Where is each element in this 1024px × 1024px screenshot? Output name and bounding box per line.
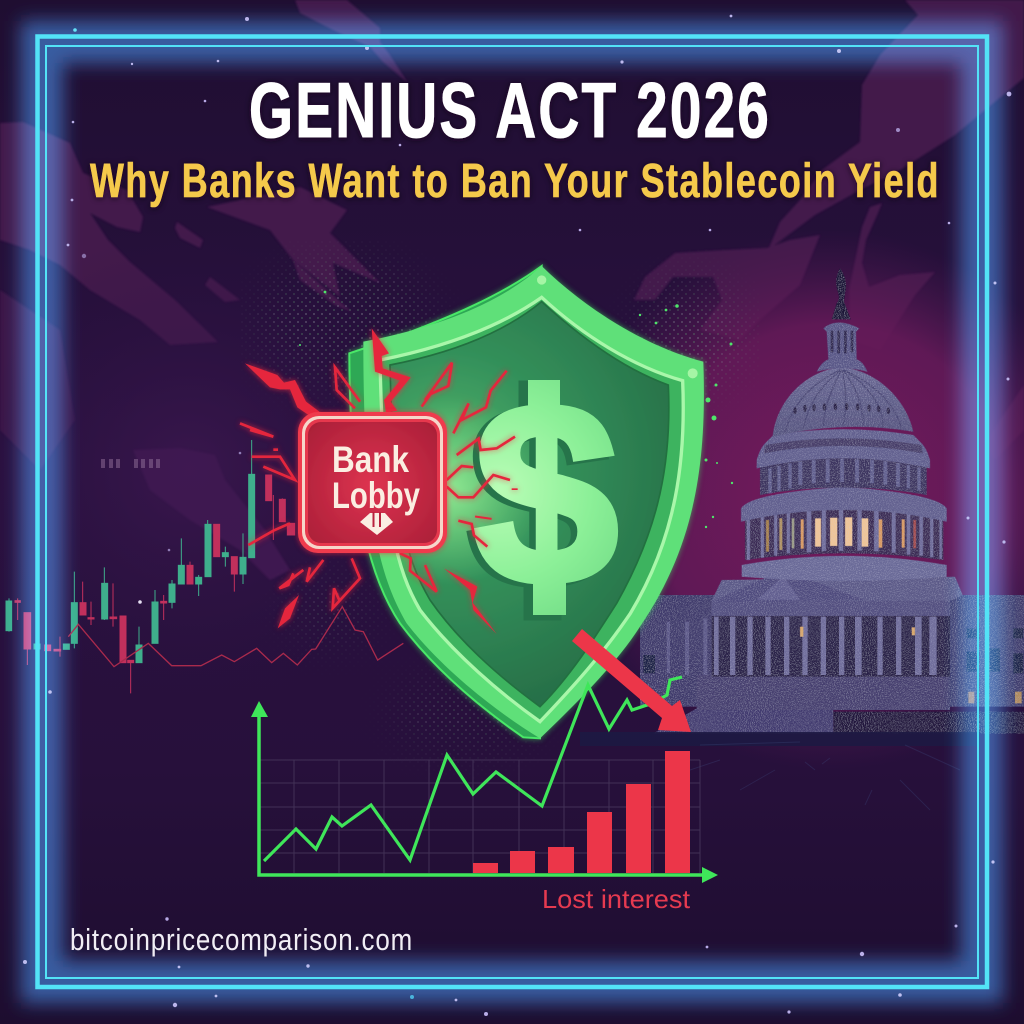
title: GENIUS ACT 2026	[249, 66, 771, 154]
capitol: right wing windows	[643, 628, 1023, 703]
capitol: upper windows	[768, 459, 921, 493]
bolt: upper arrow left	[335, 367, 360, 408]
background: halftone dots	[240, 240, 760, 780]
bolt: right lower	[447, 475, 510, 497]
bank lobby sign	[298, 412, 447, 553]
capitol: dome	[773, 367, 913, 437]
dollar sign	[468, 349, 618, 641]
lost interest label: Lost interest	[542, 884, 691, 914]
shield	[349, 266, 704, 738]
bolt: far left	[240, 423, 273, 437]
sign: lobby text: Lobby	[332, 475, 420, 516]
capitol: drum base	[742, 556, 947, 581]
growth and lost interest chart	[251, 677, 718, 883]
capitol: dome ribs	[785, 370, 902, 432]
background: faint tick blocks above candles	[101, 459, 160, 468]
capitol: columns	[667, 617, 937, 675]
bolt: right bottom	[458, 521, 487, 547]
sign: face	[308, 422, 437, 543]
shield: 3d side rim	[349, 266, 542, 738]
bolt: upper arrow right	[422, 363, 452, 407]
capitol: portico shadow	[712, 615, 950, 677]
chart: red interest bars	[473, 751, 690, 873]
bolt: bottom centre	[400, 553, 437, 592]
bolt: lower diamond	[278, 595, 299, 628]
capitol: cornice	[757, 429, 930, 468]
capitol: wings	[640, 595, 1024, 707]
dollar: face: $	[474, 349, 618, 638]
bolt: top	[372, 328, 411, 413]
green specks	[299, 291, 733, 578]
bolt: bottom left arrow	[333, 558, 360, 608]
bolt: right top	[453, 371, 507, 433]
capitol: dome oculi	[793, 403, 890, 414]
green burst behind dollar	[355, 395, 545, 585]
capitol: colonnade columns	[747, 509, 942, 560]
sign: border	[298, 412, 447, 553]
capitol: portico lights	[800, 627, 915, 637]
chart: axes	[251, 701, 718, 883]
capitol: lower storey	[697, 675, 950, 710]
capitol: lower colonnade	[745, 507, 943, 560]
lightning bolts	[240, 328, 518, 634]
capitol: statue	[832, 268, 851, 319]
capitol: lit windows	[766, 517, 916, 552]
chart: green yield line	[264, 677, 682, 861]
background: magenta smoke clouds	[0, 0, 1024, 580]
capitol: steps	[653, 708, 833, 733]
capitol: upper drum	[760, 455, 927, 495]
dollar: shadow: $	[468, 352, 612, 641]
capitol: lantern	[817, 322, 867, 372]
bolt: fragments	[273, 448, 518, 520]
footer url: bitcoinpricecomparison.com	[70, 922, 413, 957]
capitol: entablature	[712, 600, 950, 616]
capitol: terrace	[712, 577, 963, 601]
candlestick chart	[6, 440, 295, 693]
shield: inner step	[380, 297, 683, 722]
capitol building	[640, 268, 1024, 733]
capitol: dark plinth	[833, 712, 1024, 733]
sign: down icon	[360, 512, 393, 535]
shield: main plate	[363, 266, 704, 738]
chart: grid	[260, 760, 700, 873]
bolt: right middle	[457, 437, 515, 455]
red down arrow	[572, 629, 691, 732]
shield: rivets	[537, 275, 698, 378]
bolt: upper left	[245, 363, 319, 419]
ground streaks	[580, 732, 980, 810]
sign: bank text: Bank	[332, 439, 409, 480]
capitol: pediment	[712, 570, 863, 602]
shield: dark panel	[390, 302, 669, 707]
background: glow behind Capitol and left chart	[0, 230, 1024, 770]
capitol: colonnade ring	[741, 487, 947, 522]
bolt: lower right heavy	[444, 568, 497, 634]
red trend line	[68, 607, 403, 667]
